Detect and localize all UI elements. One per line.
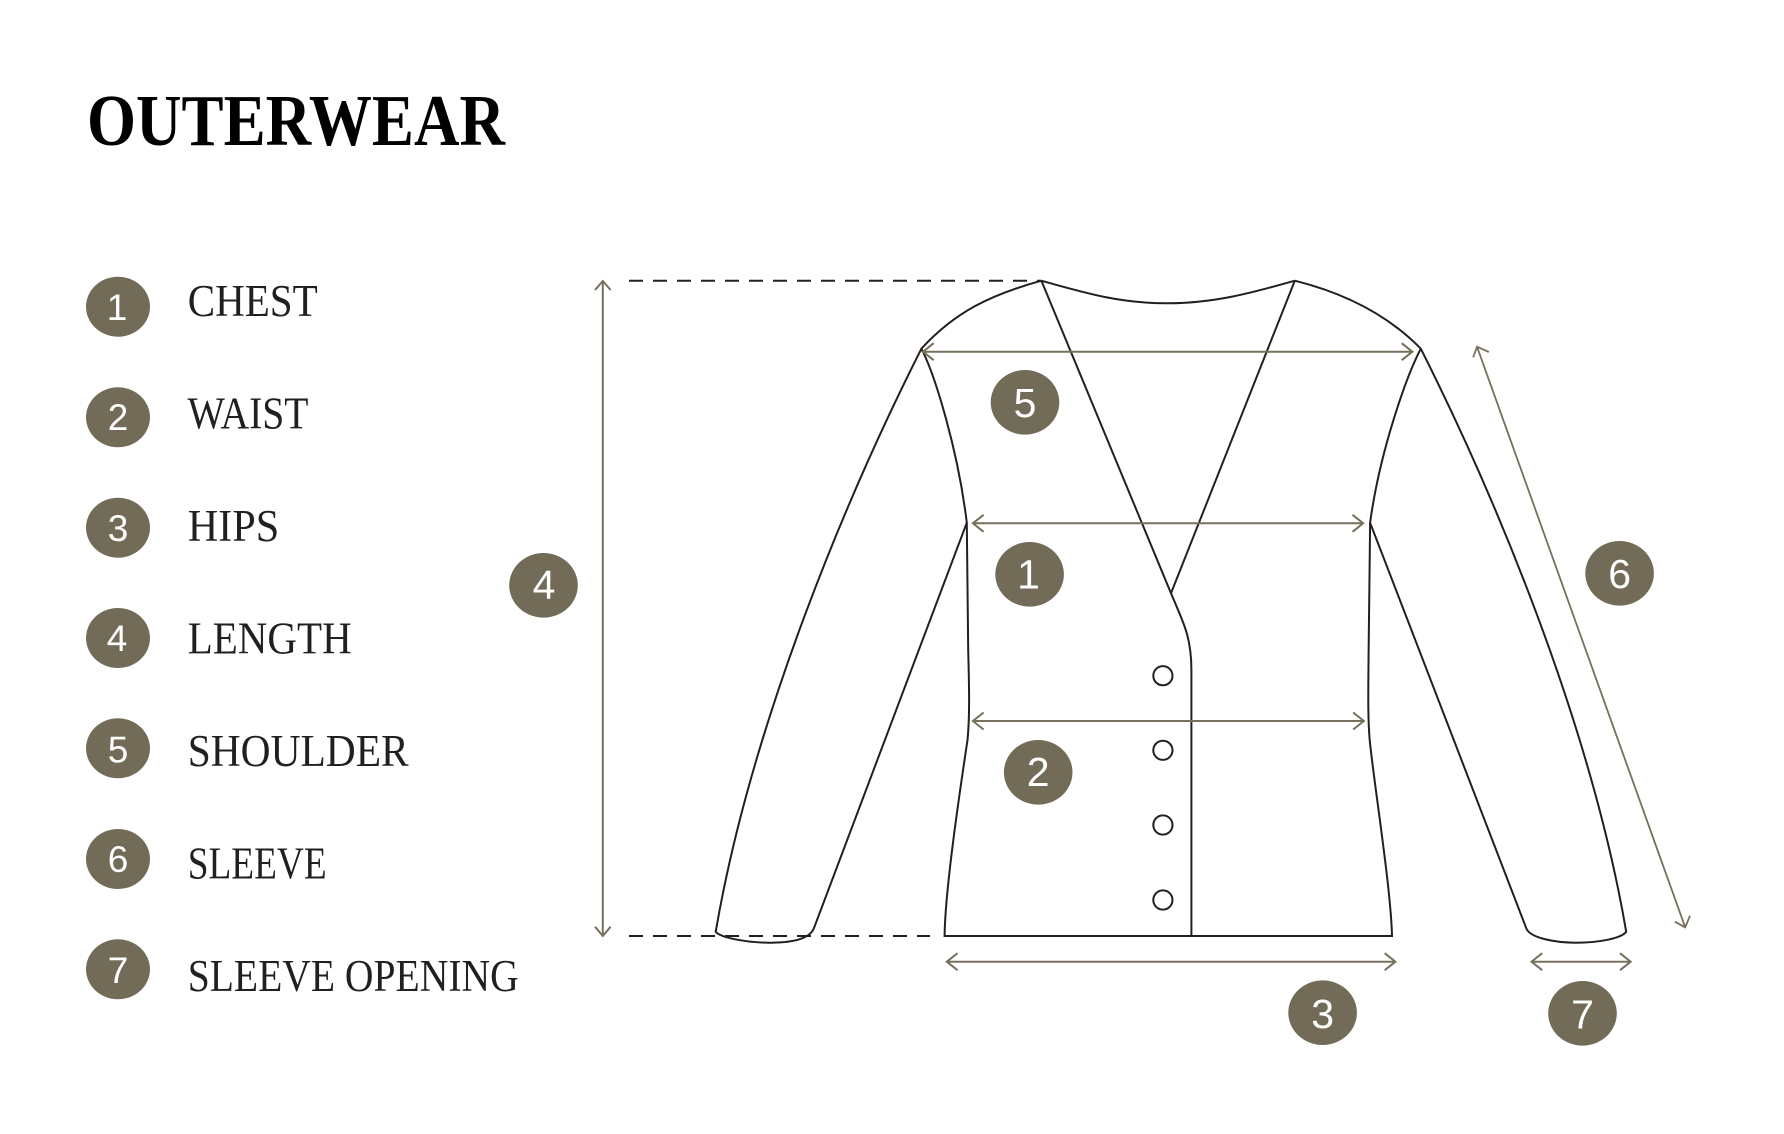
arrow 1: chest bbox=[973, 515, 1363, 532]
arrow 3: hips bbox=[947, 953, 1395, 970]
legend item 5: shoulder: SHOULDER bbox=[188, 726, 409, 776]
legend item 6: sleeve: SLEEVE bbox=[188, 838, 327, 888]
badge 1: 1 bbox=[1017, 552, 1040, 598]
badge 7 bbox=[1548, 981, 1617, 1046]
legend item 1: chest: 1 bbox=[107, 287, 127, 328]
arrow 5: shoulder bbox=[923, 343, 1412, 360]
legend item 5: shoulder bbox=[86, 718, 409, 778]
badge 1 bbox=[995, 542, 1064, 607]
arrow 2: waist bbox=[973, 712, 1364, 730]
legend item 6: sleeve: 6 bbox=[108, 839, 128, 880]
legend item 2: waist bbox=[86, 387, 308, 447]
jacket outline bbox=[716, 281, 1626, 943]
arrow 6: sleeve bbox=[1473, 347, 1690, 927]
legend item 6: sleeve bbox=[86, 829, 327, 889]
badge 2 bbox=[1004, 740, 1072, 805]
legend item 1: chest bbox=[86, 276, 318, 337]
title: OUTERWEAR bbox=[87, 80, 506, 161]
badge 5: 5 bbox=[1014, 380, 1036, 426]
legend item 3: hips bbox=[86, 498, 279, 558]
badge 6 bbox=[1585, 541, 1654, 606]
legend item 7: sleeve opening: SLEEVE OPENING bbox=[188, 951, 519, 1001]
badge 2: 2 bbox=[1027, 749, 1050, 795]
legend item 5: shoulder: 5 bbox=[108, 730, 128, 770]
badge 4: 4 bbox=[533, 562, 555, 608]
dashed guide lines bbox=[629, 281, 1041, 936]
legend item 4: length: LENGTH bbox=[188, 614, 352, 664]
buttons bbox=[1153, 666, 1172, 910]
legend item 3: hips: 3 bbox=[108, 508, 128, 549]
legend item 1: chest: CHEST bbox=[188, 276, 318, 326]
badge 7: 7 bbox=[1571, 992, 1594, 1038]
badge 3: 3 bbox=[1311, 991, 1334, 1037]
badge 6: 6 bbox=[1608, 551, 1631, 597]
legend item 7: sleeve opening: 7 bbox=[108, 950, 128, 991]
badge 4 bbox=[509, 553, 578, 618]
badge 3 bbox=[1288, 980, 1357, 1045]
legend item 7: sleeve opening bbox=[86, 939, 519, 1001]
legend item 2: waist: 2 bbox=[108, 397, 128, 438]
legend panel bbox=[86, 276, 519, 1001]
legend item 4: length bbox=[86, 608, 352, 668]
legend item 2: waist: WAIST bbox=[188, 388, 308, 438]
badge 5 bbox=[991, 370, 1059, 435]
arrow 4: length bbox=[595, 281, 611, 936]
legend item 4: length: 4 bbox=[107, 618, 127, 659]
arrow 7: sleeve opening bbox=[1532, 953, 1631, 970]
legend item 3: hips: HIPS bbox=[188, 501, 279, 551]
